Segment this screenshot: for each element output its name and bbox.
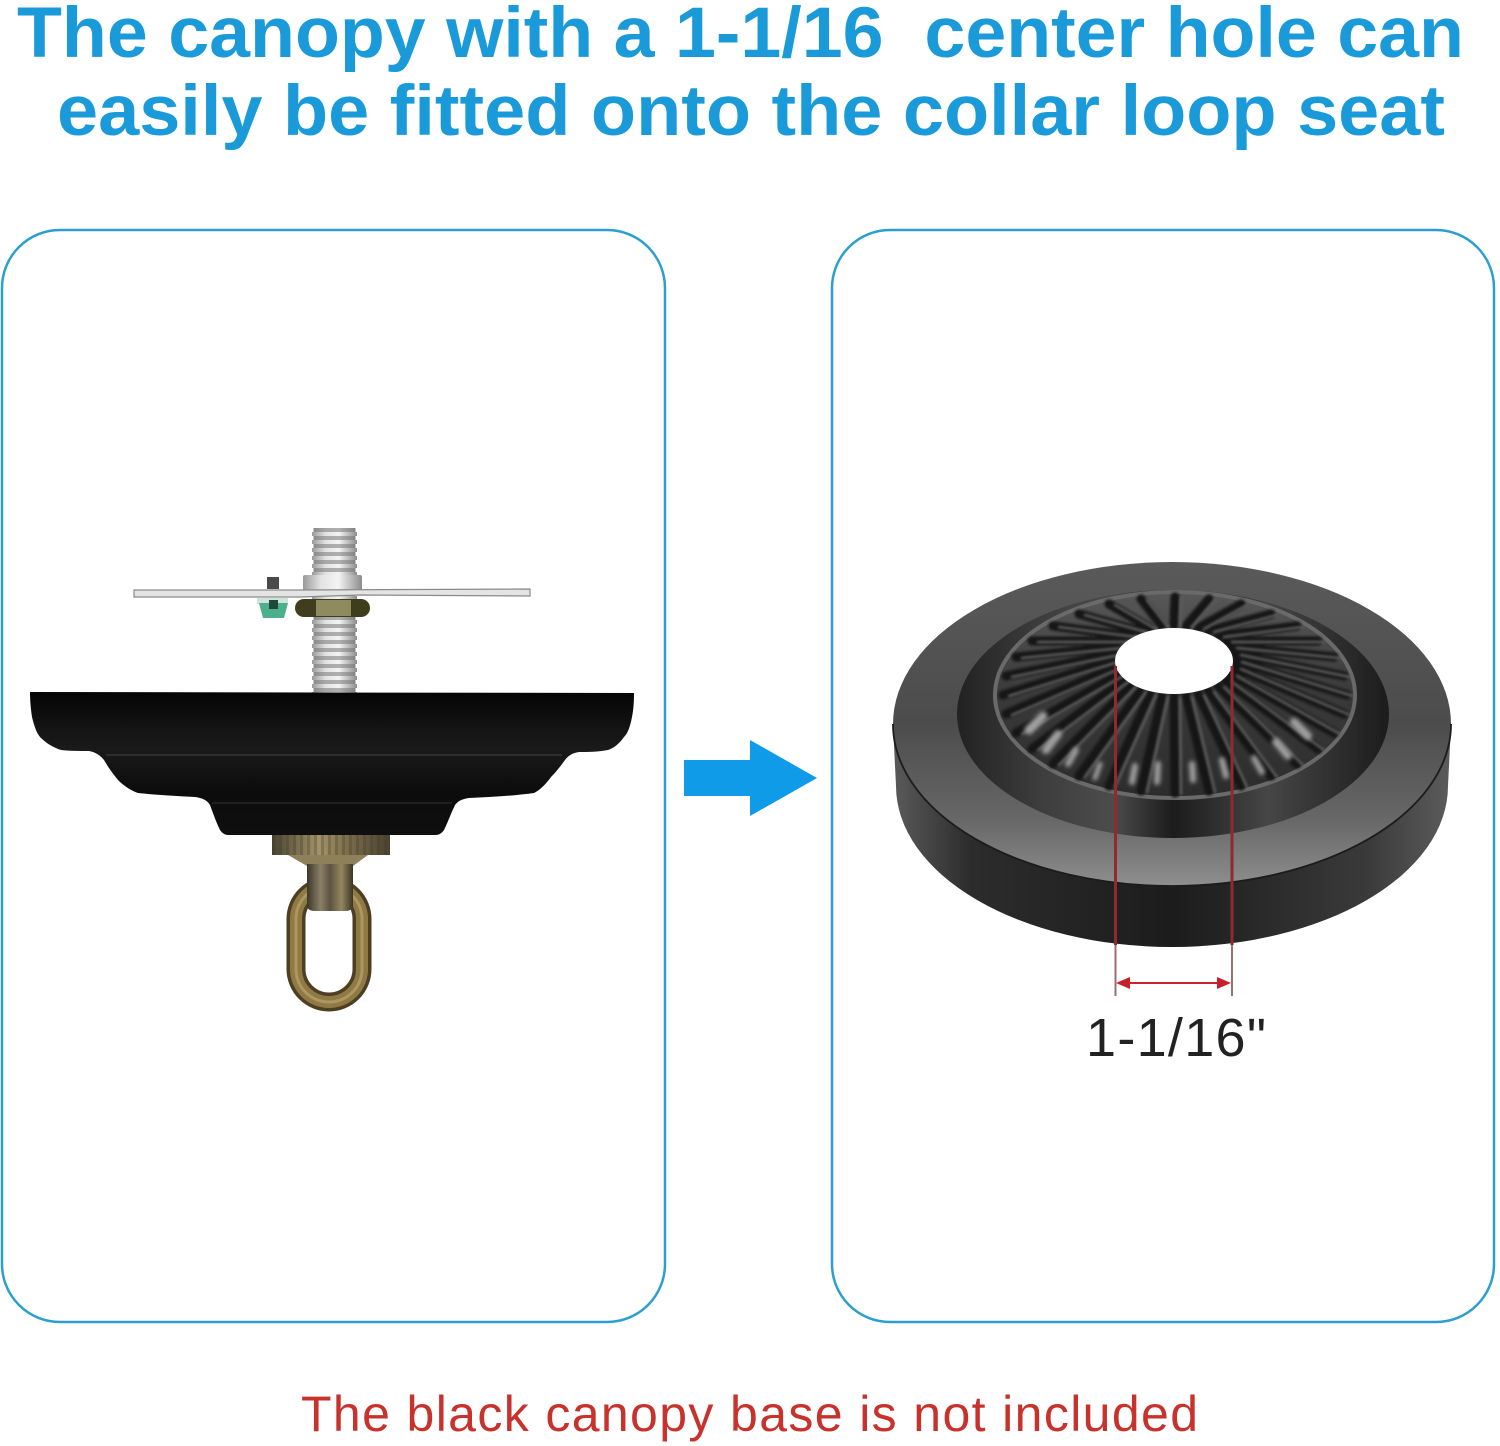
panel: assembled canopy with collar loop <box>2 230 665 1322</box>
inner raised step <box>957 590 1389 838</box>
knurled brass nut <box>272 835 390 866</box>
dimension label: 1-1/16" <box>1086 1008 1266 1068</box>
small screw head <box>267 577 279 589</box>
threaded bolt <box>312 528 357 693</box>
flat crossbar plate <box>134 589 530 597</box>
hex nut <box>295 599 370 617</box>
footer note: The black canopy base is not included <box>301 1386 1198 1442</box>
center hole <box>1115 628 1233 694</box>
black canopy side view <box>30 692 634 835</box>
collar loop ring <box>296 864 362 1002</box>
dimension lines and arrow <box>1116 666 1232 996</box>
title <box>17 0 1464 151</box>
title: easily be fitted onto the collar loop seat <box>57 72 1445 151</box>
bolt collar <box>303 575 362 592</box>
canopy base side wall <box>893 725 1451 947</box>
panel: canopy with center hole <box>832 230 1494 1322</box>
arrow <box>684 740 817 816</box>
fluted rosette <box>995 592 1355 798</box>
green screw nut <box>257 598 288 618</box>
rib highlights <box>1029 716 1308 782</box>
canopy top face <box>893 562 1451 886</box>
